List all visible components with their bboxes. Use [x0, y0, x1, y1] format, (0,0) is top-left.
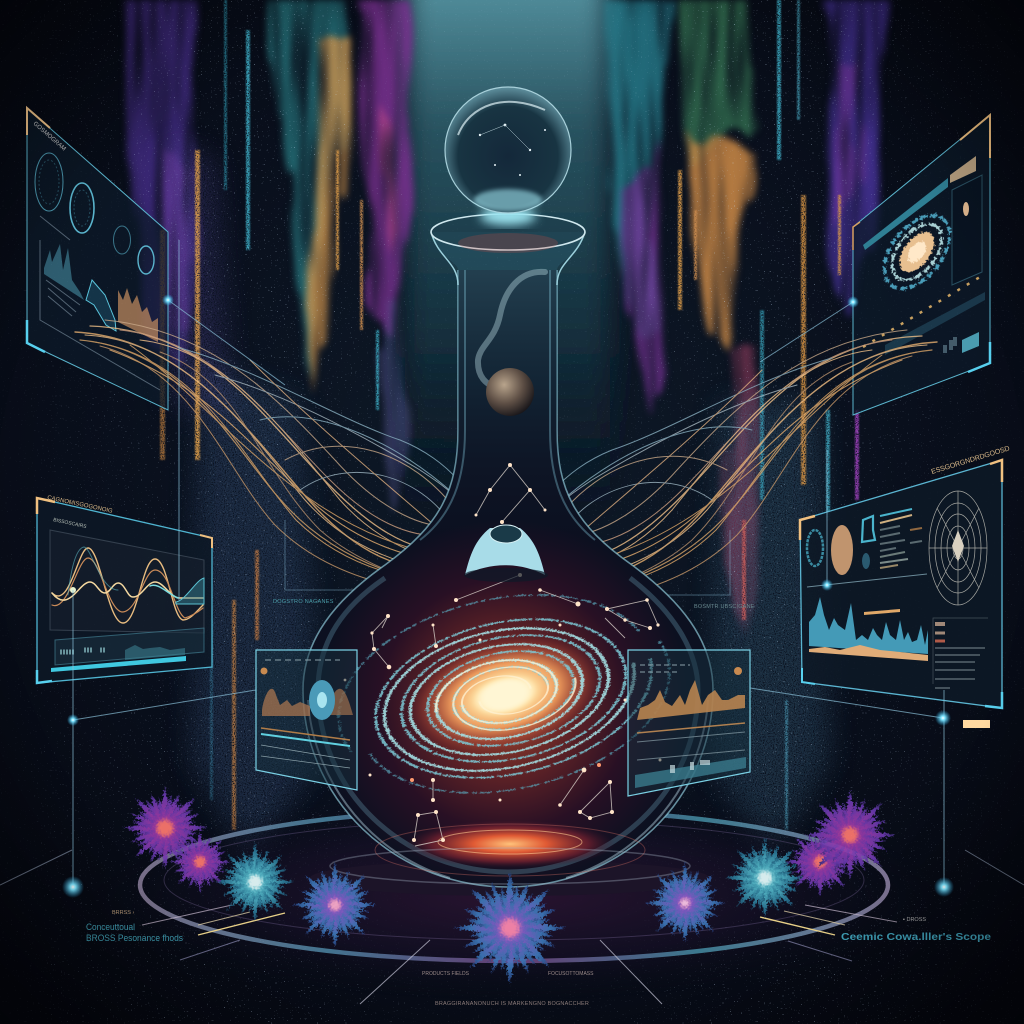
flower: left blue [286, 856, 384, 954]
galaxy [318, 561, 690, 828]
tan flower [831, 525, 853, 575]
connector lines and nodes [62, 240, 954, 898]
flower: left purple [116, 779, 214, 877]
thin vertical light bars [160, 0, 859, 830]
flower: right purple small [780, 822, 860, 902]
label: left caption [86, 922, 183, 944]
panel lines [261, 660, 350, 768]
radar chart [929, 491, 987, 605]
chart sub heading: BISSOSCAIRS [53, 517, 88, 530]
label: left flask note: DOGSTRO NAGANES [273, 599, 334, 605]
panel title: GOSMOGRAM [32, 121, 67, 152]
flask: glass body [303, 270, 713, 887]
panel: top right dashboard [853, 115, 990, 415]
constellations [372, 465, 658, 846]
legend [933, 618, 988, 688]
panel lines [637, 665, 745, 760]
blue logo [862, 516, 875, 542]
flower: left teal [210, 837, 300, 927]
flask: glowing liquid base [330, 820, 690, 884]
line chart frame [50, 530, 204, 633]
label: bottom left note: PRODUCTS FIELDS [422, 971, 470, 977]
flower: right teal [718, 831, 812, 925]
small badge [260, 668, 268, 674]
ring gauge [807, 530, 823, 566]
orange area chart [637, 680, 745, 720]
data point [70, 587, 76, 593]
control blocks [962, 332, 979, 353]
spiral arms [318, 561, 690, 828]
flask: neck glass [405, 270, 610, 552]
label: left caption: Conceuttoual [86, 922, 135, 933]
flower: left purple small [164, 826, 236, 898]
area chart: orange [118, 288, 158, 342]
panel: mid right dashboard [800, 445, 1011, 708]
area chart: blue with orange baseline [809, 597, 928, 654]
panel: small left inside flask [256, 650, 357, 790]
barcode [950, 156, 976, 183]
flask: inner reflections [308, 270, 708, 878]
stopper sphere [445, 87, 571, 213]
constellation stars [344, 463, 662, 842]
panel: top left dashboard [27, 108, 168, 410]
planet [486, 368, 534, 416]
label: bottom right note: FOCUSOTTOMASS [548, 971, 594, 977]
flowers group [116, 779, 902, 993]
detail sub panel [952, 175, 982, 285]
orange tag [963, 720, 990, 728]
label: right flask note: BOSMTR UBSCIGANE [694, 604, 755, 610]
text lines [880, 509, 922, 568]
control bar [635, 757, 746, 788]
label: right caption: Ceemic Cowa.lller's Scope [841, 931, 991, 943]
speckled dust columns [170, 140, 830, 860]
s-curve glass tube [478, 272, 545, 388]
dial gauges [35, 153, 154, 274]
small badge [734, 667, 742, 675]
flask: lip and collar [431, 207, 585, 285]
flower: center [445, 863, 575, 993]
area chart: blue [44, 244, 84, 300]
light streaks: right [604, 0, 888, 640]
panel: mid left wave chart [37, 495, 212, 683]
small dial [862, 553, 870, 569]
flowing wave lines [75, 320, 937, 605]
lower bar [885, 292, 985, 355]
divider and highlight [807, 574, 927, 587]
mini bar [51, 656, 186, 672]
chart heading: CAGNOMISGOGONOIG [47, 495, 113, 515]
cream core rings [428, 644, 584, 746]
flower: right blue [638, 856, 732, 950]
label: left caption: BROSS Pesonance fhods [86, 933, 183, 944]
galaxy view [871, 204, 963, 300]
label: bottom caption: BRAGGIRANANONUCH IS MARKENGNO BOGNACCHER [435, 1001, 589, 1007]
panel: small right inside flask [628, 650, 750, 796]
wave curves [52, 547, 204, 623]
top label: ESSGORGNDRDGOOSD [931, 445, 1011, 476]
header bar [863, 178, 948, 250]
blue sphere [309, 680, 335, 720]
glowing floor and ring [0, 790, 1024, 1004]
light streaks: left [120, 0, 412, 520]
orange signal [262, 689, 310, 716]
label: small left tag: BRRSS › [112, 910, 134, 916]
network shape [86, 280, 116, 331]
readout dots [863, 277, 980, 347]
flask: white cap inside neck [464, 525, 548, 582]
flask shadow glow [310, 860, 710, 896]
flower: right purple [798, 783, 902, 887]
label: small right tag: ▪ DROSS [903, 917, 926, 923]
